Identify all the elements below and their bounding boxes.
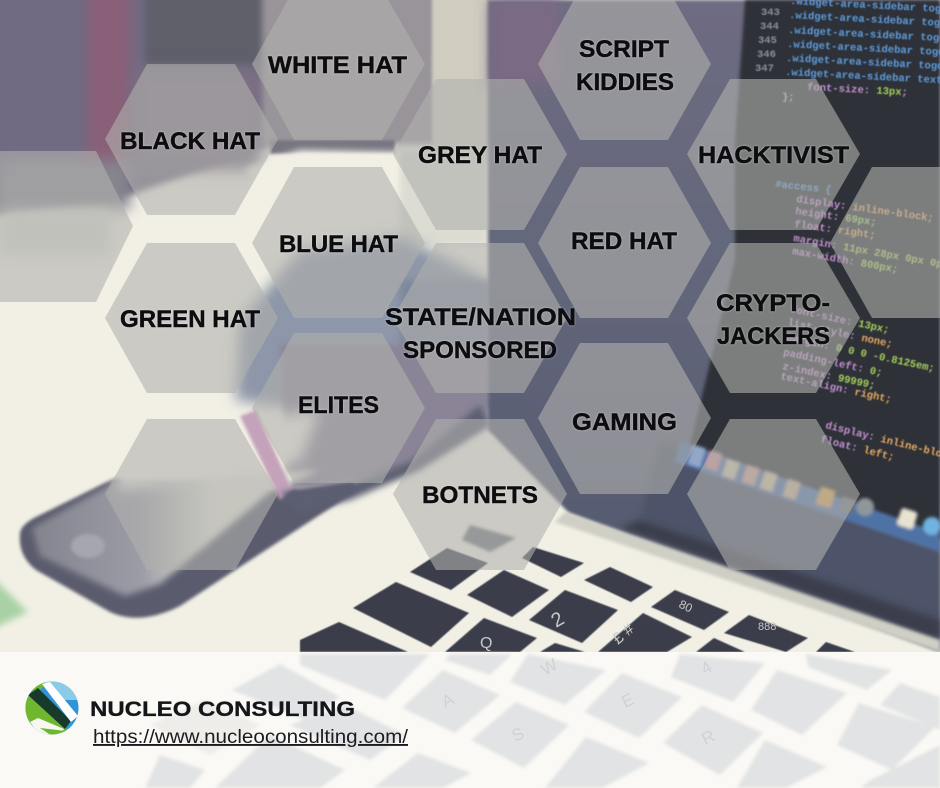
faint key letters: R — [699, 726, 718, 749]
phone — [20, 410, 358, 618]
hexagon labels — [120, 36, 849, 509]
label: gaming: GAMING — [572, 409, 677, 436]
label: sponsored: SPONSORED — [403, 337, 557, 364]
code on screen: height: 69px; — [794, 206, 877, 229]
photo background: blurred laptop and phone: Q — [480, 635, 492, 652]
code on screen: list-style: none; — [786, 317, 893, 351]
code on screen: float: right; — [793, 219, 876, 242]
keyboard keys — [300, 547, 855, 652]
code on screen: 346 — [757, 49, 776, 61]
label: hacktivist: HACKTIVIST — [698, 142, 849, 169]
photo background: blurred laptop and phone: 888 — [758, 621, 776, 633]
faint key letters: 4 — [698, 657, 715, 678]
faint key letters — [439, 655, 718, 749]
label: grey hat: GREY HAT — [418, 142, 542, 169]
hexagon: lower left — [105, 419, 278, 570]
hexagon: botnets — [393, 419, 567, 570]
hexagon: hacktivist — [687, 79, 860, 230]
hexagon: blue hat — [252, 167, 425, 318]
code on screen: padding-left: 0; — [782, 347, 883, 380]
icon: nucleo logo — [26, 682, 78, 734]
code on screen: text-align: right; — [779, 371, 893, 406]
label: black hat: BLACK HAT — [120, 128, 260, 155]
code on screen: display: inline-block; — [795, 194, 934, 225]
label: botnets: BOTNETS — [422, 482, 538, 509]
code on screen: z-index: 99999; — [781, 361, 876, 393]
faint key letters: A — [439, 689, 458, 712]
code on screen: margin: 0 0 0 -0.8125em; — [785, 332, 936, 375]
faint key letters: S — [509, 724, 527, 746]
label: jackers: JACKERS — [717, 323, 830, 350]
code on screen: font-size: 13px; — [789, 304, 890, 337]
hexagon: black hat — [105, 64, 278, 215]
code on screen: #access { — [775, 179, 832, 197]
label: script: SCRIPT — [579, 36, 669, 63]
code on screen: 347 — [755, 63, 774, 75]
hexagon: elites — [252, 333, 425, 483]
code on screen: 343 — [761, 7, 780, 19]
top left lilac backdrop — [0, 0, 488, 255]
photo background: blurred laptop and phone: 2 — [548, 608, 568, 632]
hexagon: green hat — [105, 243, 278, 393]
label: blue hat: BLUE HAT — [279, 231, 398, 258]
faint key letters: E — [619, 690, 637, 712]
blurred object behind centre hexagons — [235, 236, 490, 490]
footer band — [0, 652, 940, 788]
laptop lid — [488, 0, 940, 652]
label: elites: ELITES — [298, 392, 379, 419]
pink streak and dark band beside phone — [240, 405, 490, 512]
code on screen: .widget-area-sidebar togo — [787, 39, 940, 59]
code on screen: float: left; — [819, 434, 895, 464]
hexagon: red hat — [538, 167, 711, 318]
code on screen: font-size: 13px; — [807, 82, 908, 99]
hexagon: grey hat — [393, 79, 567, 230]
hexagon: state/nation sponsored — [393, 243, 567, 393]
laptop base edge — [555, 512, 940, 652]
photo background: blurred laptop and phone: £ # — [610, 621, 638, 648]
website url: https://www.nucleoconsulting.com/ — [93, 727, 409, 748]
hexagon: lower right — [687, 419, 860, 570]
label: crypto-: CRYPTO- — [716, 290, 830, 317]
label: green hat: GREEN HAT — [120, 306, 260, 333]
hexagon: crypto-jackers — [687, 243, 860, 393]
hexagon: far left — [0, 151, 133, 302]
hexagon: white hat — [252, 0, 425, 140]
hexagon: far right — [830, 167, 940, 318]
faint key letters: W — [538, 655, 561, 679]
code on screen: }; — [782, 92, 795, 104]
hexagon: script kiddies — [538, 0, 711, 140]
label: red hat: RED HAT — [571, 228, 677, 255]
code on screen: 345 — [758, 35, 777, 47]
code on screen: max-width: 800px; — [791, 246, 899, 277]
code on screen: 344 — [760, 21, 779, 33]
code on screen: .widget-area-sidebar togo — [786, 53, 940, 73]
code on screen: .widget-area-sidebar text — [785, 67, 940, 87]
code on screen — [755, 0, 940, 465]
label: white hat: WHITE HAT — [268, 52, 407, 79]
brand name: NUCLEO CONSULTING — [90, 697, 355, 721]
label: kiddies: KIDDIES — [576, 69, 674, 96]
dock — [675, 442, 940, 552]
laptop screen — [690, 0, 940, 540]
panel: hexagon grid — [0, 0, 940, 570]
label: state/nation: STATE/NATION — [385, 304, 576, 331]
hexagon: gaming — [538, 343, 711, 494]
photo background: blurred laptop and phone: 80 — [677, 597, 695, 615]
